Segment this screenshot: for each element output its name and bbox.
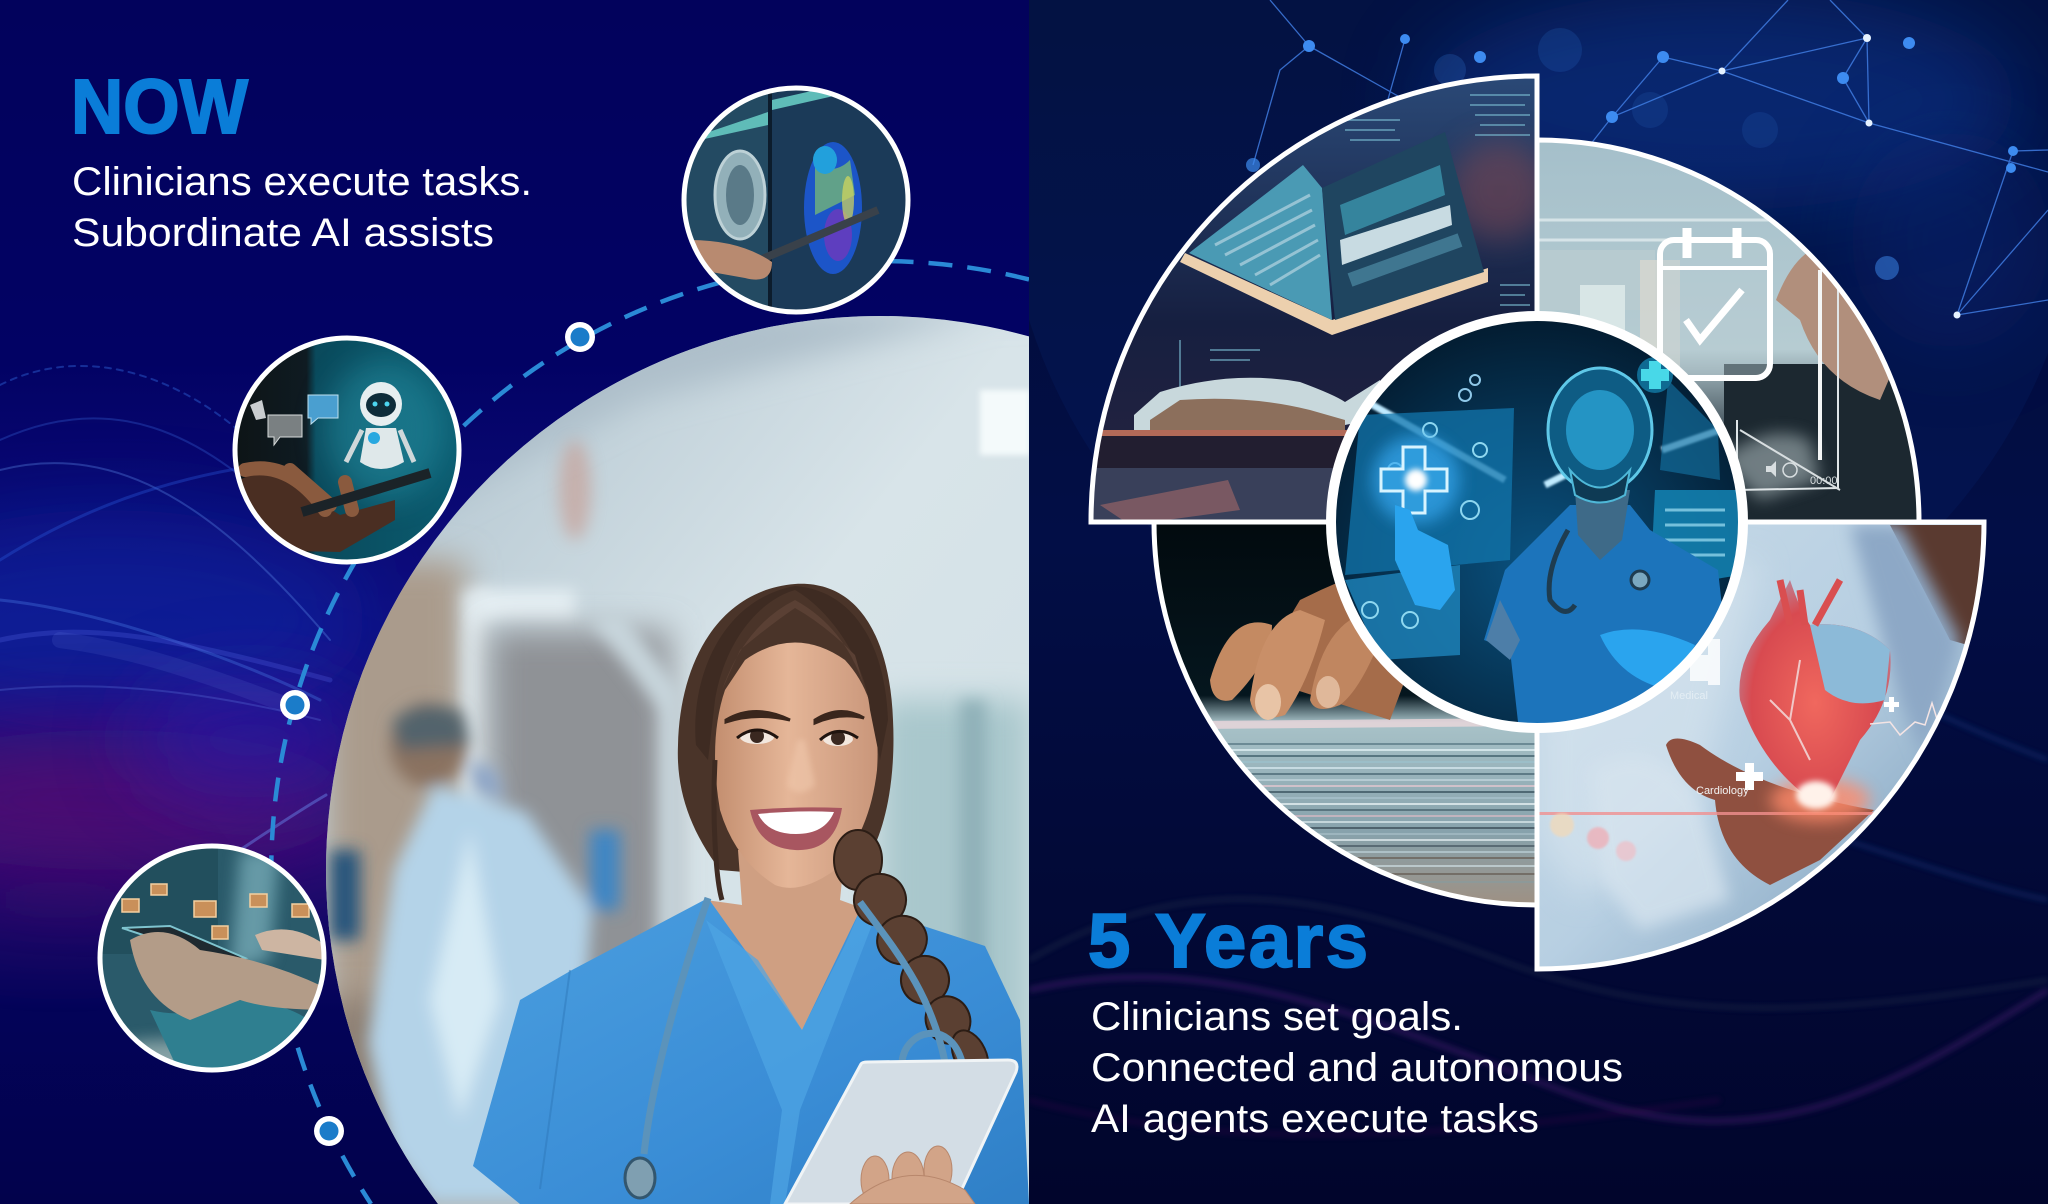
eyebrows	[726, 712, 790, 722]
panel: 5 Years (right side)	[1029, 0, 2048, 1204]
gloved hands	[1395, 505, 1695, 690]
text block: now description: Clinicians execute tasks.	[72, 160, 532, 204]
heart	[1739, 580, 1891, 809]
face	[715, 642, 878, 888]
nurse	[473, 584, 1029, 1204]
background disc and glow	[1029, 0, 2048, 698]
text block: five year description: Clinicians set goals.	[1091, 995, 1463, 1039]
timeline node 2	[280, 690, 310, 720]
eyes	[737, 729, 858, 746]
timeline node 1	[565, 322, 595, 352]
floating book	[1180, 132, 1488, 335]
timeline node 3	[314, 1116, 344, 1146]
braid	[833, 829, 989, 1060]
molecule panels	[1345, 375, 1740, 660]
image circle: brain scan review	[680, 80, 912, 316]
background light waves	[0, 366, 330, 850]
neck and chest skin	[706, 850, 862, 1030]
red glow line	[1537, 778, 1887, 861]
hair front	[695, 586, 888, 760]
photo: smiling nurse in a hospital corridor	[320, 300, 1040, 1204]
text block: five year description: AI agents execute tasks	[1091, 1097, 1539, 1141]
title: NOW: NOW	[71, 64, 248, 150]
segment: holographic heart in hand	[1535, 520, 1990, 975]
text block: five year description: Connected and autonomous	[1091, 1046, 1623, 1090]
nose	[789, 741, 814, 792]
segment: hand over fibre light streams	[1150, 520, 1540, 910]
side hair strands	[714, 760, 722, 900]
segment: glowing digital books	[1085, 70, 1550, 530]
segment: digital calendar checklist	[1535, 135, 1925, 525]
tablet	[785, 1060, 1017, 1204]
calendar icon	[1660, 228, 1770, 378]
data panels	[1180, 95, 1530, 500]
smile	[750, 807, 842, 850]
text block: now description	[74, 166, 528, 246]
glowing cross	[1372, 436, 1460, 524]
hand	[1210, 560, 1420, 720]
medical plus icons and labels: Cardiology	[1696, 785, 1749, 797]
centre circle: AI clinician with holographic interface	[1327, 312, 1747, 740]
light streams	[1200, 722, 1540, 882]
panel: NOW (left side)	[0, 0, 1040, 1204]
corridor background	[320, 300, 1040, 1204]
left panel background	[0, 0, 1029, 1010]
title: 5 Years: 5 Years	[1088, 899, 1368, 984]
figure: scrubs, neck and hologram head	[1484, 368, 1730, 740]
plus icon badge	[1637, 357, 1673, 393]
dashed orbit path	[271, 261, 1029, 1204]
hands	[850, 1146, 975, 1204]
bottom faint waves	[1029, 640, 2048, 1135]
image circle: person using phone with AI robot	[233, 336, 463, 566]
medical plus icons and labels	[1670, 639, 1899, 797]
hand	[1666, 738, 1874, 885]
text block: now description: Subordinate AI assists	[72, 211, 494, 255]
image circle: hands holding phone with glowing messages	[90, 844, 330, 1080]
light beams	[1355, 395, 1720, 485]
blurred colleague in lab coat	[330, 703, 620, 1204]
network graph	[1246, 0, 2048, 318]
medical plus icons and labels: Medical	[1670, 690, 1708, 702]
scrub top	[473, 898, 1029, 1204]
right panel background	[1029, 0, 2048, 1204]
text block: five year description	[1091, 995, 1623, 1141]
open book on table	[1134, 378, 1380, 430]
hair behind head	[678, 584, 893, 880]
stethoscope	[625, 898, 962, 1198]
video player label: 00:00	[1810, 475, 1838, 487]
background glow: blue and purple haze	[0, 510, 370, 930]
